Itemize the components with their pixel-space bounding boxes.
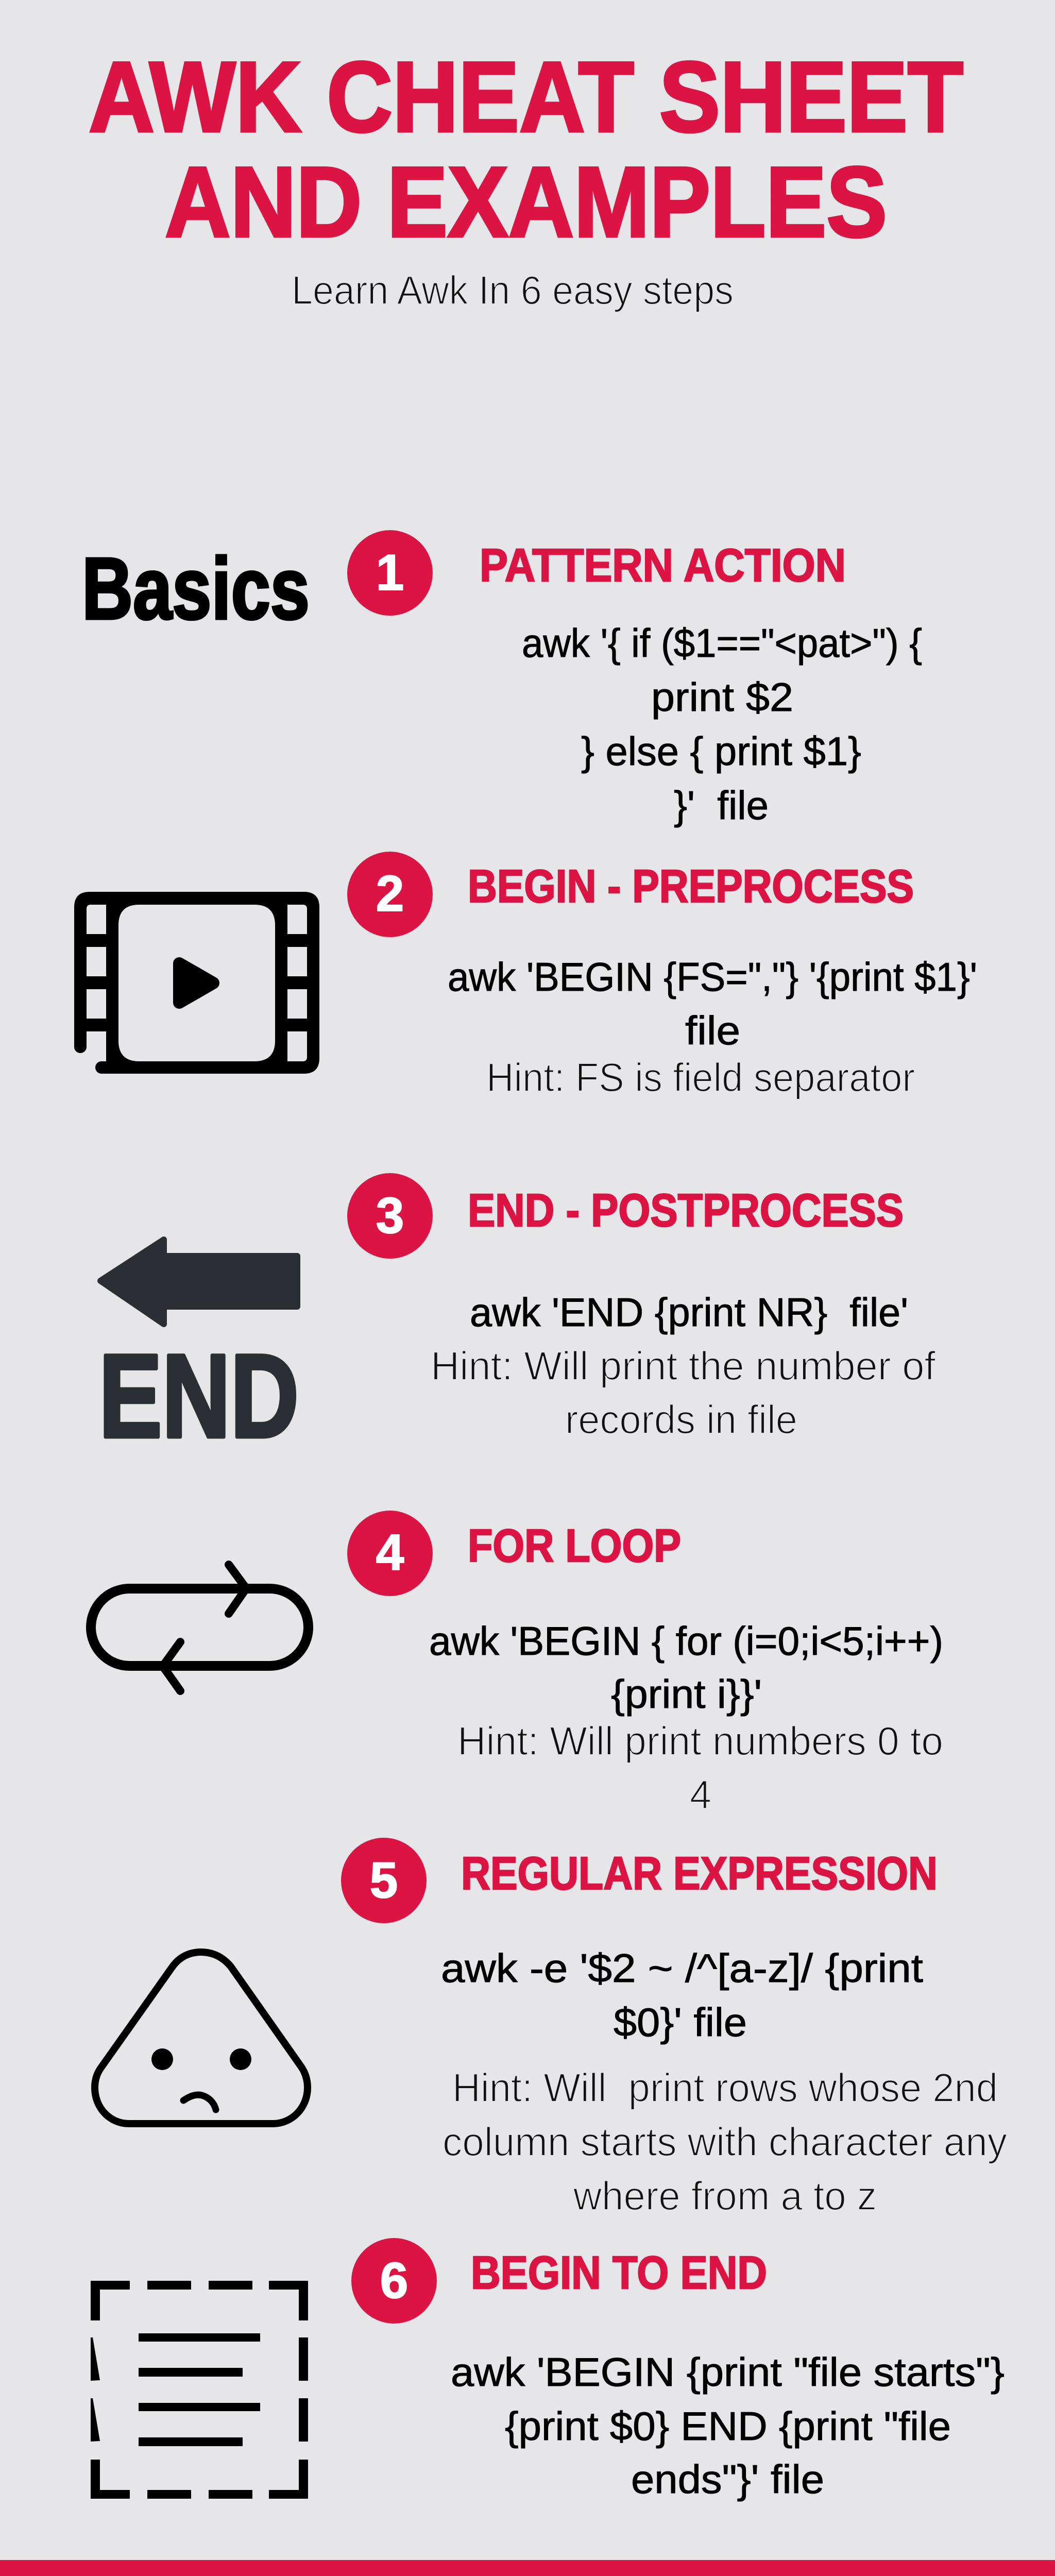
code: pattern action: } else { print $1} xyxy=(581,728,861,774)
hint: numbers 0 to 4 xyxy=(457,1718,943,1817)
step number 4: 4 xyxy=(376,1524,404,1581)
hint: numbers 0 to 4: 4 xyxy=(690,1772,711,1817)
panel: step 4 for loop xyxy=(91,1511,943,1817)
code: for loop: awk 'BEGIN { for (i=0;i<5;i++) xyxy=(429,1618,943,1664)
panel: step 5 regular expression xyxy=(95,1838,1007,2218)
step number 6 xyxy=(351,2238,437,2324)
footer band xyxy=(0,2560,1055,2576)
code: pattern action xyxy=(522,620,922,828)
subtitle: Learn Awk In 6 easy steps xyxy=(292,267,734,313)
hint: rows whose 2nd column: Hint: Will print rows whose 2nd xyxy=(452,2065,998,2110)
heading: begin to end: BEGIN TO END xyxy=(471,2247,767,2299)
hint: number of records: records in file xyxy=(565,1397,797,1442)
hint: numbers 0 to 4: Hint: Will print numbers 0 to xyxy=(457,1718,943,1764)
panel: step 1 pattern action xyxy=(82,530,922,828)
hint: number of records: Hint: Will print the number of xyxy=(431,1343,935,1388)
code: for loop: {print i}}' xyxy=(611,1671,762,1717)
icon: film strip with play button xyxy=(74,892,319,1074)
icon: sad triangle face xyxy=(95,1952,308,2124)
code: begin to end: awk 'BEGIN {print "file starts"} xyxy=(451,2349,1005,2395)
code: regular expression xyxy=(441,1945,923,2045)
title: AND EXAMPLES xyxy=(165,146,887,258)
code: begin preprocess: awk 'BEGIN {FS=","} '{print $1}' xyxy=(448,954,977,999)
hint: number of records xyxy=(431,1343,935,1442)
title xyxy=(89,41,963,258)
code: regular expression: $0}' file xyxy=(614,1999,747,2045)
step number 3 xyxy=(347,1173,433,1259)
step number 5 xyxy=(341,1838,427,1923)
code: begin to end xyxy=(451,2349,1005,2502)
step number 6: 6 xyxy=(380,2252,408,2309)
step number 3: 3 xyxy=(376,1187,404,1244)
step number 1: 1 xyxy=(376,544,404,601)
code: pattern action: awk '{ if ($1=="<pat>") { xyxy=(522,620,922,666)
code: for loop xyxy=(429,1618,943,1717)
heading: end postprocess: END - POSTPROCESS xyxy=(468,1185,904,1236)
code: begin preprocess xyxy=(448,954,977,1053)
hint: rows whose 2nd column: where from a to z xyxy=(573,2173,877,2218)
panel: step 3 end postprocess xyxy=(99,1173,935,1462)
code: pattern action: print $2 xyxy=(651,674,793,720)
code: begin preprocess: file xyxy=(685,1008,740,1053)
code: begin to end: {print $0} END {print "file xyxy=(505,2403,951,2449)
step number 4 xyxy=(347,1511,433,1596)
step number 1 xyxy=(347,530,433,616)
icon: loop arrows xyxy=(91,1565,308,1691)
code: regular expression: awk -e '$2 ~ /^[a-z]/ {print xyxy=(441,1945,923,1991)
step number 5: 5 xyxy=(370,1852,398,1908)
icon: END arrow: END xyxy=(99,1330,299,1462)
icon: dashed document xyxy=(91,2281,308,2499)
heading: begin preprocess: BEGIN - PREPROCESS xyxy=(468,861,914,912)
icon: Basics wordmark: Basics xyxy=(82,540,310,638)
heading: regular expression: REGULAR EXPRESSION xyxy=(461,1848,938,1900)
hint: field separator: Hint: FS is field separator xyxy=(486,1055,915,1100)
heading: pattern action: PATTERN ACTION xyxy=(480,540,846,591)
icon: END arrow xyxy=(99,1240,299,1462)
heading: for loop: FOR LOOP xyxy=(468,1520,681,1572)
code: end postprocess: awk 'END {print NR} file' xyxy=(470,1290,908,1335)
panel: step 2 begin preprocess xyxy=(74,852,977,1100)
code: begin to end: ends"}' file xyxy=(631,2456,824,2502)
step number 2: 2 xyxy=(376,865,404,922)
hint: rows whose 2nd column xyxy=(443,2065,1007,2218)
hint: rows whose 2nd column: column starts with character any xyxy=(443,2119,1007,2164)
title: AWK CHEAT SHEET xyxy=(89,41,963,153)
step number 2 xyxy=(347,852,433,937)
code: pattern action: }' file xyxy=(674,783,769,828)
panel: step 6 begin to end xyxy=(91,2238,1005,2502)
